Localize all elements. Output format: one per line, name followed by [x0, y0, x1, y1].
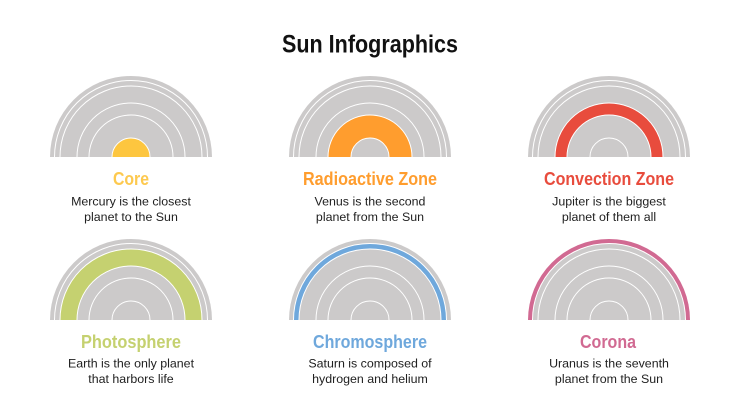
- panel: chromosphere: [289, 239, 451, 386]
- text: corona description: Uranus is the seventh: [549, 356, 669, 370]
- heading: convection zone: Convection Zone: [544, 168, 674, 189]
- heading: corona: Corona: [580, 331, 637, 352]
- text: core description: planet to the Sun: [84, 210, 178, 224]
- text: photosphere description: Earth is the only planet: [68, 356, 195, 370]
- text: radioactive zone description: planet from the Sun: [316, 210, 424, 224]
- text: chromosphere description: Saturn is composed of: [308, 356, 432, 370]
- panel: convection zone: [528, 76, 690, 224]
- icon: core half rings: [50, 76, 212, 157]
- text: convection zone description: Jupiter is the biggest: [552, 194, 666, 208]
- heading: chromosphere: Chromosphere: [313, 331, 427, 352]
- text: photosphere description: that harbors life: [88, 372, 174, 386]
- panel: core: [50, 76, 212, 224]
- text: chromosphere description: hydrogen and helium: [312, 372, 428, 386]
- text: corona description: planet from the Sun: [555, 372, 663, 386]
- panel: radioactive zone: [289, 76, 451, 224]
- panel: photosphere: [50, 239, 212, 386]
- panel: corona: [528, 239, 690, 386]
- icon: corona half rings: [528, 239, 690, 320]
- text: radioactive zone description: Venus is the second: [315, 194, 426, 208]
- icon: convection zone half rings: [528, 76, 690, 157]
- title: Sun Infographics: [282, 30, 458, 58]
- heading: core: Core: [113, 168, 149, 189]
- text: core description: Mercury is the closest: [71, 194, 191, 208]
- icon: chromosphere half rings: [289, 239, 451, 320]
- text: convection zone description: planet of them all: [562, 210, 656, 224]
- icon: radioactive zone half rings: [289, 76, 451, 157]
- heading: photosphere: Photosphere: [81, 331, 181, 352]
- heading: radioactive zone: Radioactive Zone: [303, 168, 437, 189]
- icon: photosphere half rings: [50, 239, 212, 320]
